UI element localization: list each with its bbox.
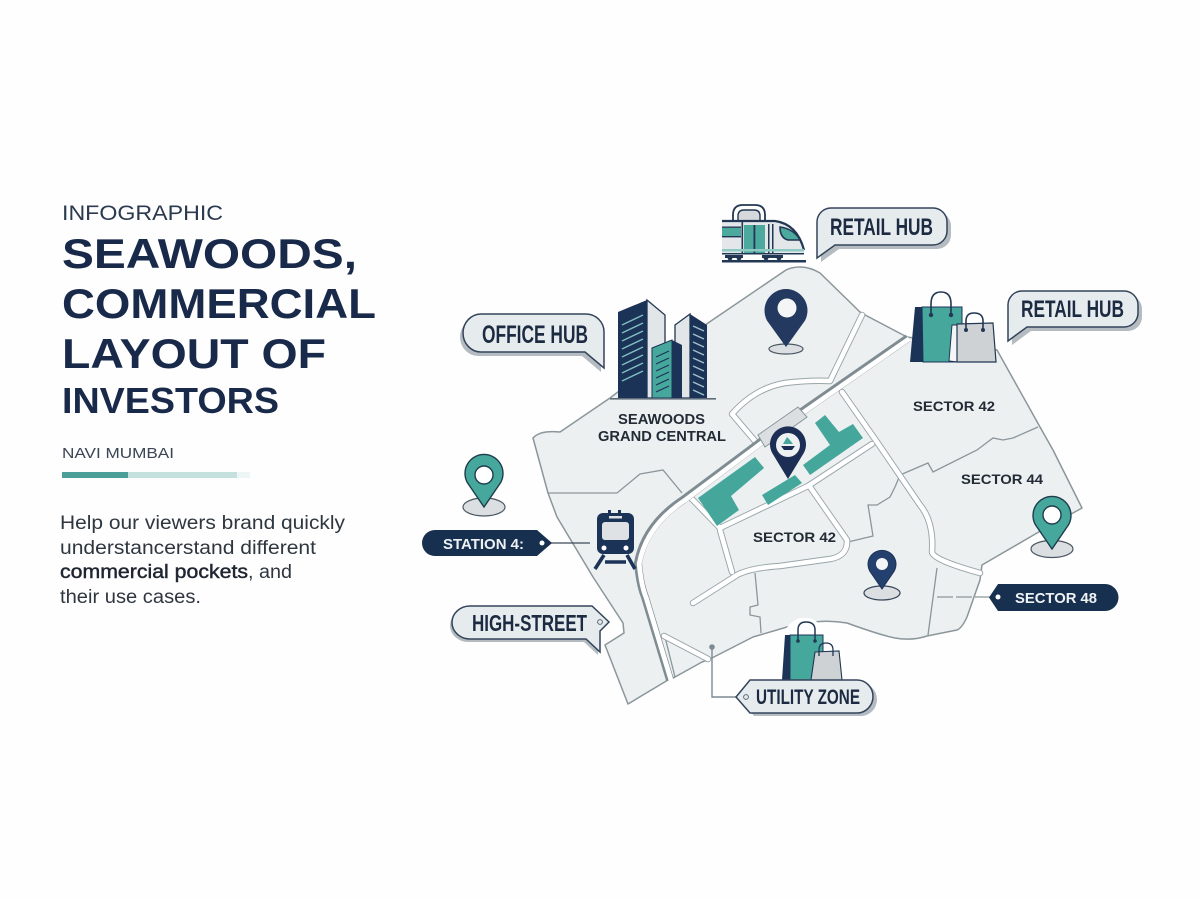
map of sectors [533, 267, 1082, 704]
teal commercial block 1 [698, 457, 764, 526]
map pin: teal right [1031, 496, 1073, 558]
description text: understancerstand different [60, 538, 317, 559]
minor roads [664, 315, 980, 659]
tag: sector 48 [989, 584, 1118, 611]
callout: retail hub top: RETAIL HUB [830, 214, 933, 241]
callout: utility zone with leader: UTILITY ZONE [756, 685, 860, 709]
map pin: small navy [864, 550, 900, 600]
left text column [60, 202, 376, 608]
callout: utility zone with leader [709, 644, 877, 716]
main road and rail line [638, 338, 909, 681]
map base shape [533, 267, 1082, 704]
teal commercial block 2 [762, 475, 802, 505]
label: sector 42 upper: SECTOR 42 [913, 398, 995, 414]
callout: office hub: OFFICE HUB [482, 321, 588, 349]
tag: station with leader: STATION 4: [443, 536, 524, 553]
icon: metro train front view [595, 510, 635, 569]
title: SEAWOODS, [62, 230, 357, 277]
callout: retail hub right [1008, 291, 1142, 345]
icon: shopping bags top right [910, 292, 996, 362]
tag: sector 48: SECTOR 48 [1015, 590, 1097, 607]
map pin: centre with ship emblem [770, 426, 806, 479]
description text: , and [248, 562, 292, 583]
left tower [618, 300, 665, 398]
icon: shopping bags bottom [782, 618, 845, 680]
label: seawoods grand central: SEAWOODS [618, 412, 705, 428]
title [62, 230, 376, 421]
title: LAYOUT OF [62, 330, 326, 377]
tag: station with leader [422, 530, 590, 556]
callout: high-street: HIGH-STREET [472, 610, 587, 636]
progress accent bar [62, 472, 250, 478]
right tower [675, 314, 707, 398]
eyebrow: infographic: INFOGRAPHIC [62, 202, 223, 225]
sector boundary lines [548, 427, 1038, 677]
description text: commercial pockets [60, 562, 248, 583]
title: COMMERCIAL [62, 280, 376, 327]
callout: retail hub right: RETAIL HUB [1021, 296, 1124, 323]
icon: office towers [610, 300, 716, 400]
station platform [758, 407, 807, 447]
label: seawoods grand central: GRAND CENTRAL [598, 429, 726, 445]
label: sector 44: SECTOR 44 [961, 471, 1043, 487]
title: INVESTORS [62, 380, 279, 421]
icon: metro train side view [722, 205, 806, 262]
description text: their use cases. [60, 587, 201, 608]
map labels [598, 398, 1043, 545]
subtitle: navi mumbai: NAVI MUMBAI [62, 445, 174, 462]
label: seawoods grand central [598, 412, 726, 445]
callout: high-street [450, 606, 609, 655]
description text [60, 513, 346, 608]
teal commercial block 3 [803, 415, 863, 475]
map pin: teal left [463, 454, 505, 516]
label: sector 42 centre: SECTOR 42 [753, 529, 836, 545]
callout: retail hub top [817, 208, 951, 262]
map pin: navy top [764, 289, 808, 354]
description text: Help our viewers brand quickly [60, 513, 346, 534]
teal tower [652, 340, 682, 398]
minor roads white centre [664, 315, 980, 659]
callout: office hub [460, 314, 604, 372]
